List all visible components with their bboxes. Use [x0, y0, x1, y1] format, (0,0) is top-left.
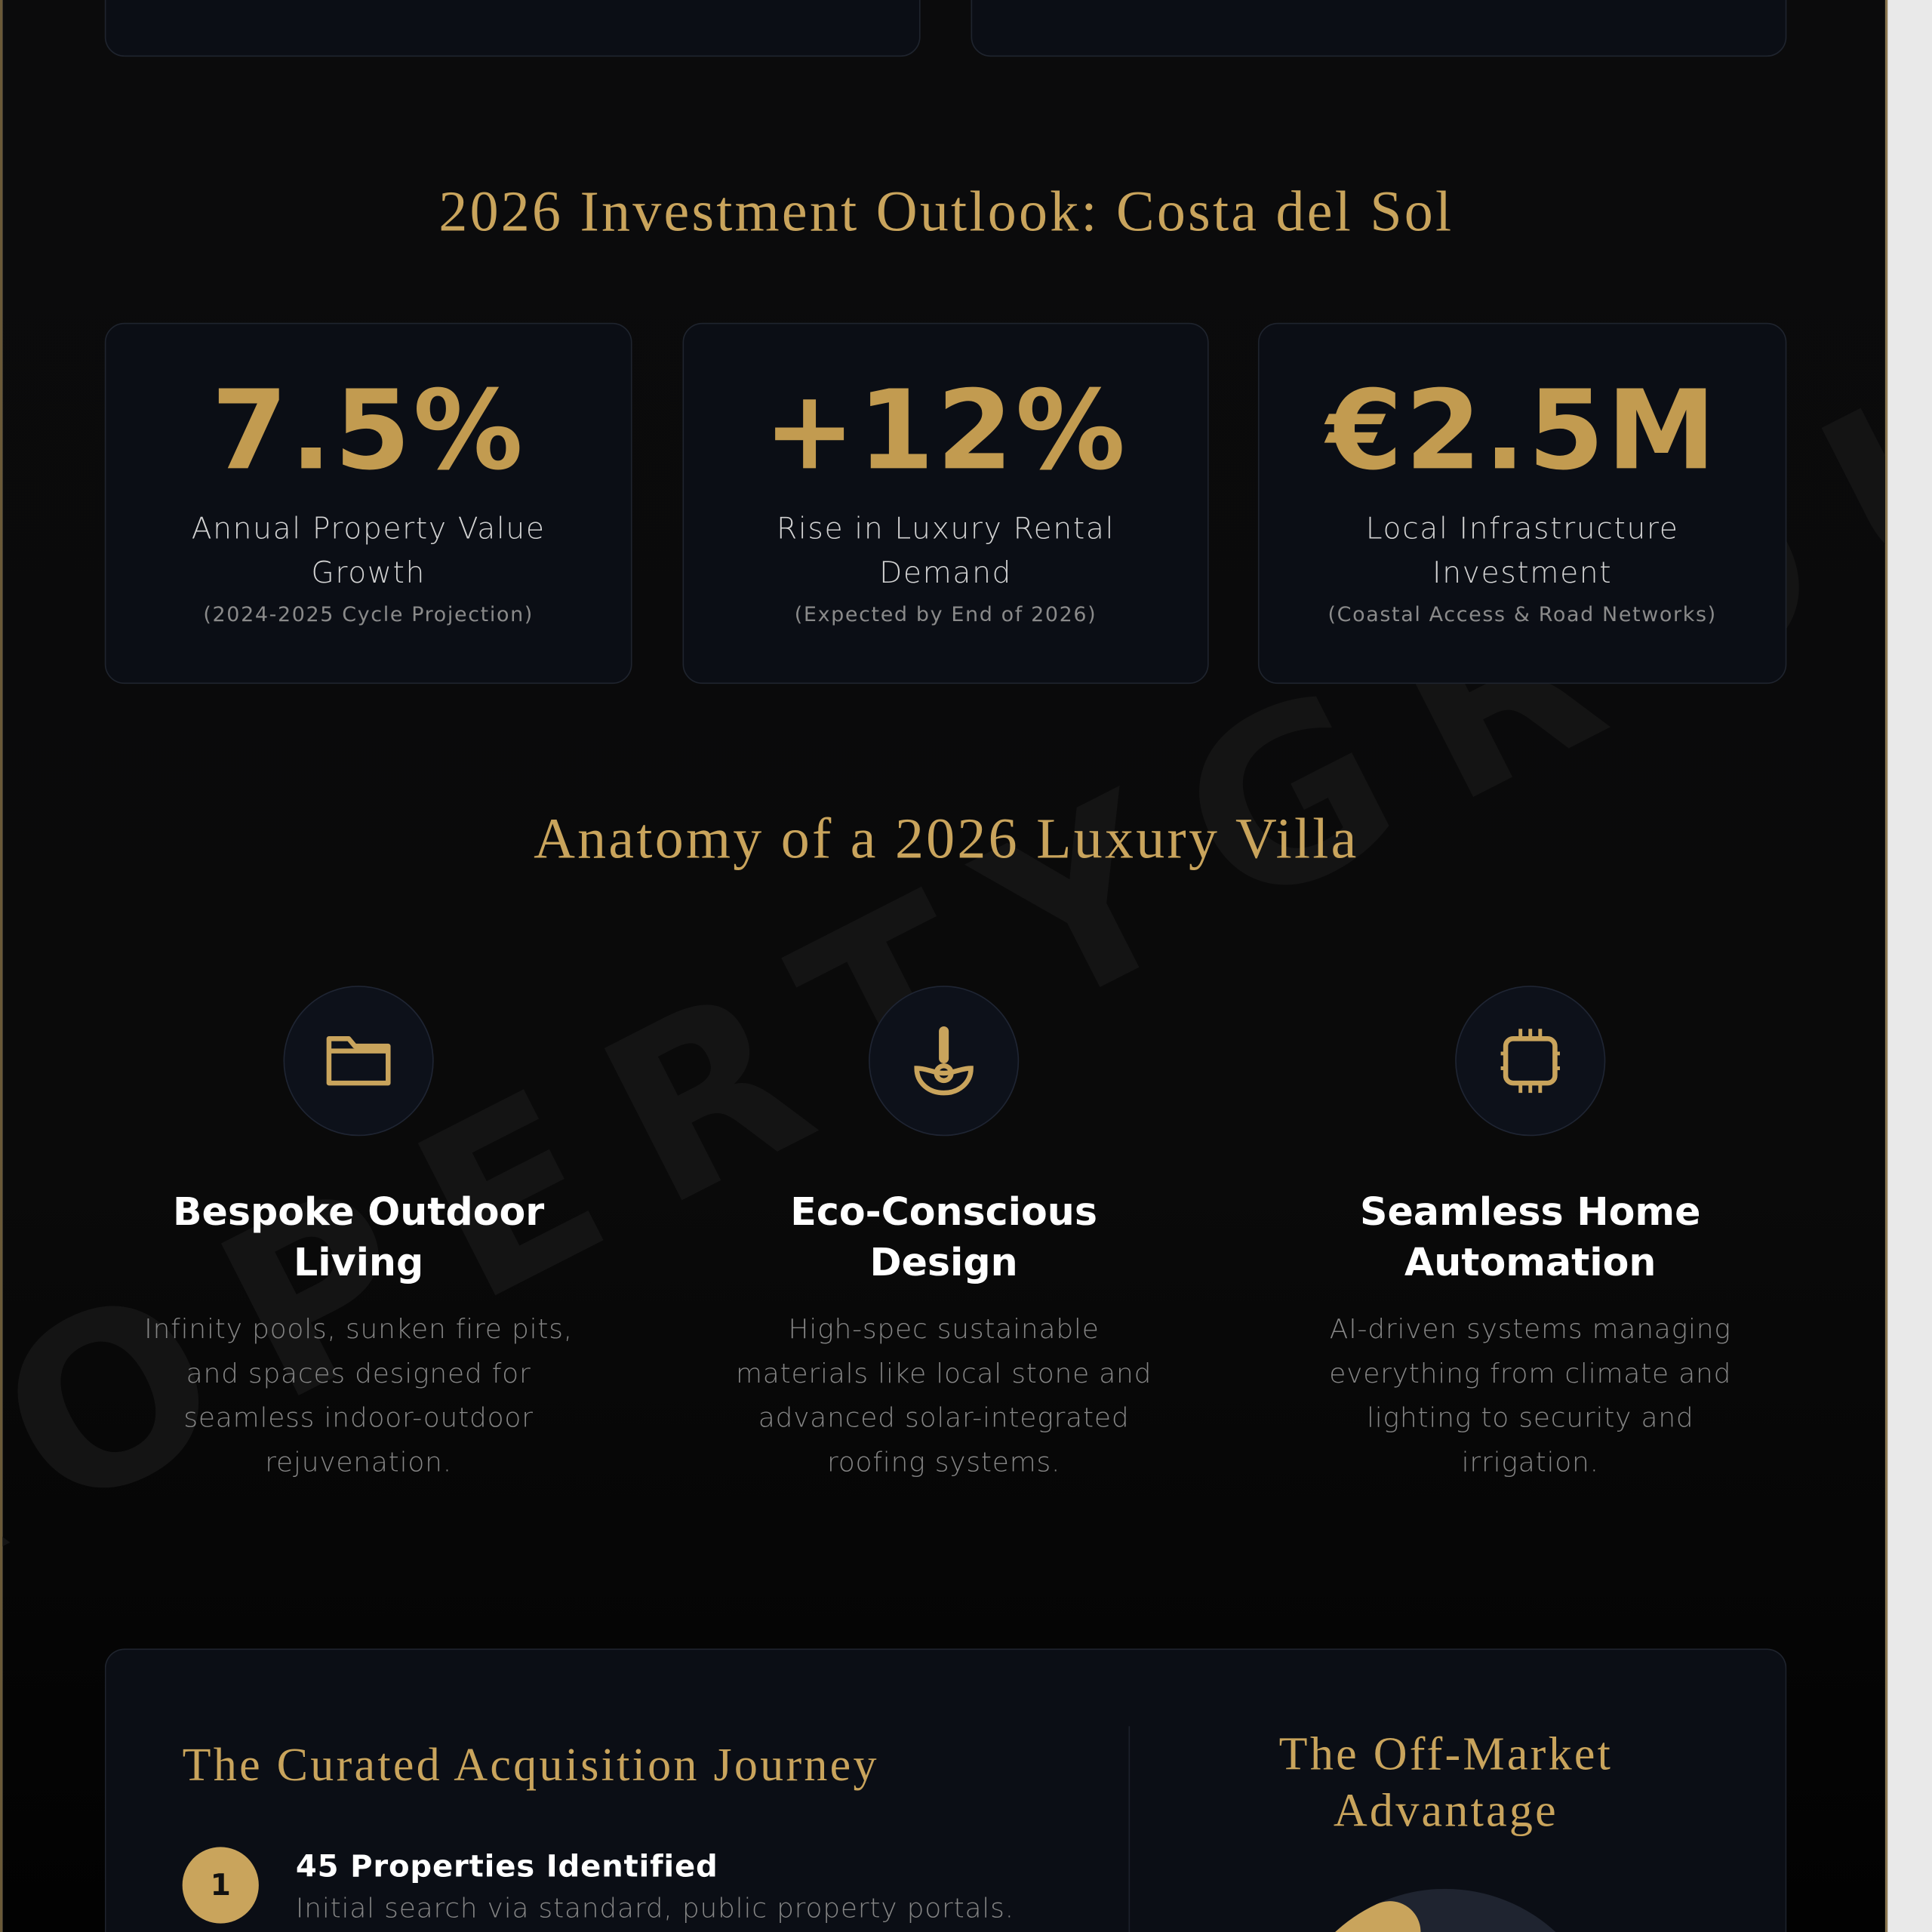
feature: automation	[1329, 986, 1731, 1478]
heading: journey: The Curated Acquisition Journey	[183, 1740, 879, 1792]
heading: off-market	[1279, 1729, 1613, 1837]
feature: outdoor: and spaces designed for	[186, 1359, 531, 1390]
feature: automation: irrigation.	[1462, 1447, 1599, 1478]
feature: eco	[736, 986, 1152, 1478]
stat card 2: (Expected by End of 2026)	[795, 602, 1097, 626]
feature: eco: roofing systems.	[827, 1447, 1060, 1478]
step 1: 45 Properties Identified	[296, 1848, 718, 1884]
stat card 3: Local Infrastructure	[1366, 512, 1679, 546]
feature: automation: everything from climate and	[1329, 1359, 1731, 1390]
feature: eco: advanced solar-integrated	[758, 1404, 1129, 1434]
feature: eco: Design	[870, 1241, 1018, 1285]
step badge	[183, 1847, 259, 1924]
feature: eco: materials like local stone and	[736, 1359, 1152, 1390]
icon: folder	[284, 986, 434, 1136]
stat card 2: +12%	[764, 366, 1128, 494]
icon: chip	[1455, 986, 1605, 1136]
icon: eco	[869, 986, 1019, 1136]
stat card 2	[682, 323, 1209, 684]
feature: outdoor	[144, 986, 573, 1478]
divider	[1129, 1726, 1130, 1932]
feature: outdoor: Living	[294, 1241, 423, 1285]
feature: eco: Eco-Conscious	[790, 1190, 1097, 1235]
stat card 3: €2.5M	[1326, 366, 1718, 494]
title: investment outlook: 2026 Investment Outlook: Costa del Sol	[438, 181, 1454, 244]
step 1	[183, 1847, 1014, 1924]
feature: eco: High-spec sustainable	[789, 1315, 1100, 1346]
stat card 2: Demand	[879, 555, 1012, 590]
step 1: Initial search via standard, public property portals.	[296, 1894, 1014, 1924]
feature: outdoor: seamless indoor-outdoor	[183, 1404, 534, 1434]
feature: automation: Seamless Home	[1360, 1190, 1700, 1235]
stat card 1: (2024-2025 Cycle Projection)	[203, 602, 534, 626]
feature: outdoor: Bespoke Outdoor	[173, 1190, 544, 1235]
title: anatomy: Anatomy of a 2026 Luxury Villa	[534, 808, 1359, 871]
stat card 3	[1258, 323, 1786, 684]
stat card 3: Investment	[1432, 555, 1612, 590]
heading: off-market: The Off-Market	[1279, 1729, 1613, 1780]
feature: automation: Automation	[1404, 1241, 1656, 1285]
feature: automation: lighting to security and	[1367, 1404, 1694, 1434]
top card left	[105, 0, 921, 57]
panel: journey and off-market	[105, 1648, 1786, 1932]
stat card 1: Growth	[311, 555, 426, 590]
feature: outdoor: Infinity pools, sunken fire pits,	[144, 1315, 573, 1346]
stat card 1: 7.5%	[211, 366, 525, 494]
stat card 1: Annual Property Value	[192, 512, 546, 546]
step badge: 1	[211, 1868, 231, 1903]
stat card 2: Rise in Luxury Rental	[777, 512, 1115, 546]
heading: off-market: Advantage	[1334, 1786, 1558, 1837]
feature: outdoor: rejuvenation.	[265, 1447, 452, 1478]
stat card 1	[105, 323, 632, 684]
stat card 3: (Coastal Access & Road Networks)	[1328, 602, 1717, 626]
top card right	[971, 0, 1786, 57]
donut chart	[1335, 1889, 1555, 1932]
feature: automation: AI-driven systems managing	[1330, 1315, 1731, 1346]
